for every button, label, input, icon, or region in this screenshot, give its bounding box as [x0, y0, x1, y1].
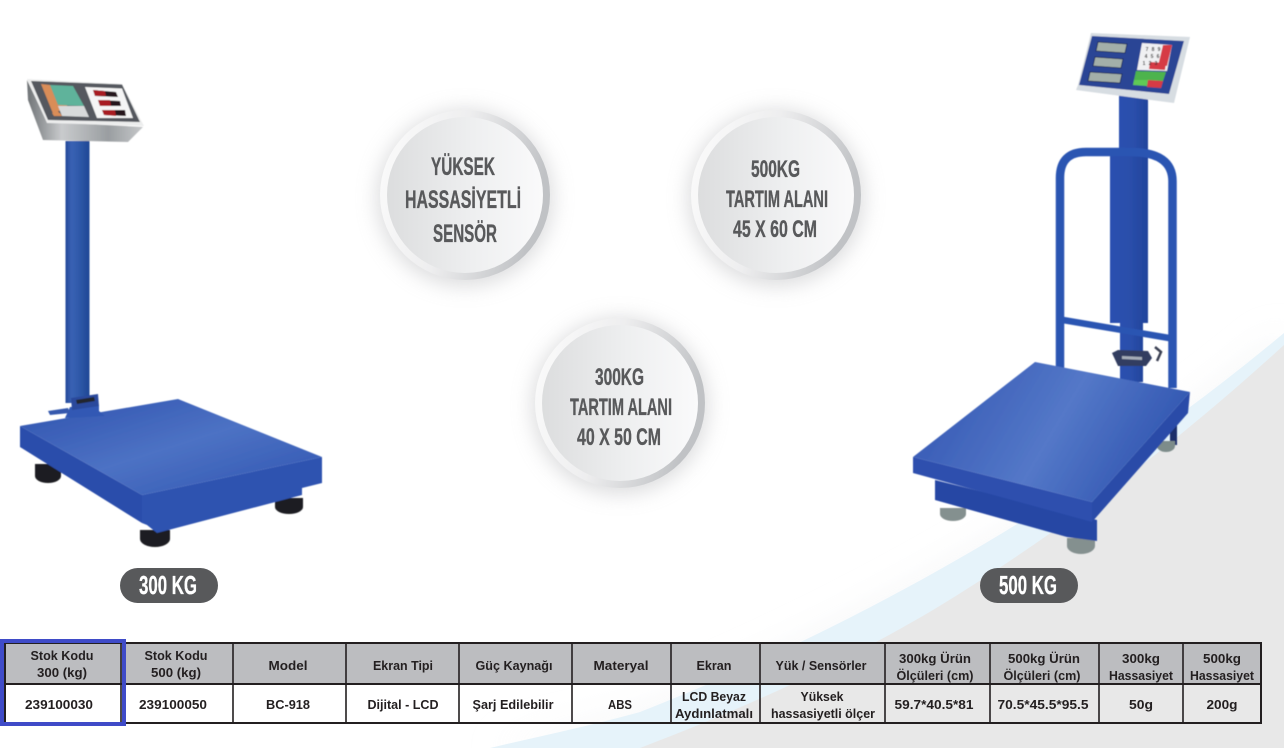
keypad digits: 6	[1157, 54, 1160, 60]
label pill: 300 KG	[120, 568, 218, 603]
keypad digits: 7	[1146, 47, 1149, 53]
table header row: Materyal	[594, 659, 648, 673]
foot: right rear	[275, 498, 303, 514]
platform side faces	[913, 392, 1190, 522]
table value row: 200g	[1206, 698, 1238, 712]
lcd displays	[1088, 42, 1127, 83]
foot: left	[940, 508, 966, 521]
table value row: 59.7*40.5*81	[894, 698, 974, 712]
foot: left rear	[35, 464, 61, 483]
table header row: 300kg	[1122, 652, 1160, 666]
table value row: Şarj Edilebilir	[472, 698, 554, 712]
table value row: LCD Beyaz	[682, 690, 746, 704]
rear guard handle	[1060, 152, 1173, 388]
table header row: 300 (kg)	[37, 666, 87, 680]
table value row: hassasiyetli ölçer	[771, 707, 875, 721]
keypad digits: 3	[1155, 61, 1158, 67]
badge text	[405, 152, 521, 248]
table value row: 70.5*45.5*95.5	[998, 698, 1089, 712]
support post	[66, 141, 90, 403]
label pill: 500 KG: 500 KG	[999, 570, 1057, 600]
table value row: Aydınlatmalı	[675, 707, 753, 721]
keypad digits: 5	[1151, 54, 1154, 60]
table value row	[25, 690, 1238, 721]
badge text: TARTIM ALANI	[570, 394, 672, 421]
keypad digits: 2	[1149, 61, 1152, 67]
foot: rear	[1157, 425, 1177, 452]
table header row: 300kg Ürün	[899, 651, 971, 666]
feature badge: 300kg weighing area	[532, 318, 708, 494]
platform side faces	[20, 426, 322, 533]
label pill: 300 KG: 300 KG	[139, 570, 197, 600]
keypad digits	[1143, 47, 1161, 67]
foot: front	[140, 530, 170, 547]
support post	[1119, 95, 1148, 155]
highlight frame: 300 kg stock code column	[2, 641, 124, 724]
table value row: BC-918	[266, 698, 310, 712]
keypad digits: 4	[1145, 54, 1148, 60]
keypad	[1133, 43, 1172, 88]
table value row: Yüksek	[800, 690, 844, 704]
badge text: 300KG	[595, 364, 644, 391]
table header background	[5, 643, 1261, 684]
badge text: 45 X 60 CM	[733, 216, 817, 243]
badge text: TARTIM ALANI	[726, 186, 828, 213]
table header row: Hassasiyet	[1109, 669, 1174, 683]
table header row	[30, 649, 1255, 683]
badge text: 500KG	[751, 156, 800, 183]
platform top	[913, 362, 1190, 502]
keypad digits: 1	[1143, 61, 1146, 67]
under frame	[935, 480, 1097, 541]
feature badge: high sensitivity sensor	[377, 110, 553, 286]
badge text	[570, 364, 672, 451]
table header row: 500 (kg)	[151, 666, 201, 680]
table header row: Ekran Tipi	[373, 659, 433, 673]
badge text: HASSASİYETLİ	[405, 186, 521, 214]
indicator head	[27, 79, 144, 142]
badge text: YÜKSEK	[431, 152, 495, 181]
table value row: 239100050	[139, 698, 207, 712]
table header row: Stok Kodu	[30, 649, 94, 663]
table value row: Dijital - LCD	[368, 698, 438, 712]
table header row: Güç Kaynağı	[476, 659, 552, 673]
product: 500 kg platform scale	[913, 33, 1190, 554]
table header row: Ölçüleri (cm)	[896, 668, 974, 683]
table value row: 239100030	[25, 698, 93, 712]
product: 300 kg platform scale	[20, 79, 322, 547]
platform top	[20, 399, 322, 495]
keypad	[41, 84, 89, 117]
table header row: Stok Kodu	[144, 649, 208, 663]
specification table	[5, 643, 1261, 723]
indicator head	[1076, 33, 1190, 103]
badge text: SENSÖR	[433, 219, 497, 248]
badge text: 40 X 50 CM	[577, 424, 661, 451]
table header row: Hassasiyet	[1190, 669, 1255, 683]
keypad digits: 8	[1152, 47, 1155, 53]
table header row: 500kg Ürün	[1008, 651, 1080, 666]
table header row: 500kg	[1203, 652, 1241, 666]
post clamp	[1112, 347, 1161, 366]
label pill: 500 KG	[980, 568, 1078, 603]
foot: front	[1067, 538, 1095, 554]
table header row: Ölçüleri (cm)	[1004, 668, 1080, 683]
table value row: ABS	[608, 698, 632, 712]
post clamp	[48, 394, 105, 418]
feature badge: 500kg weighing area	[688, 110, 864, 286]
red digit displays	[93, 90, 126, 116]
keypad digits: 9	[1158, 47, 1161, 53]
display panel	[85, 87, 133, 118]
table header row: Yük / Sensörler	[776, 659, 867, 673]
table grid lines	[5, 643, 1261, 723]
table value row: 50g	[1129, 698, 1153, 712]
table header row: Model	[268, 659, 308, 673]
background: grey swoosh with light blue band	[490, 333, 1284, 748]
badge text	[726, 156, 828, 243]
table header row: Ekran	[696, 659, 732, 673]
